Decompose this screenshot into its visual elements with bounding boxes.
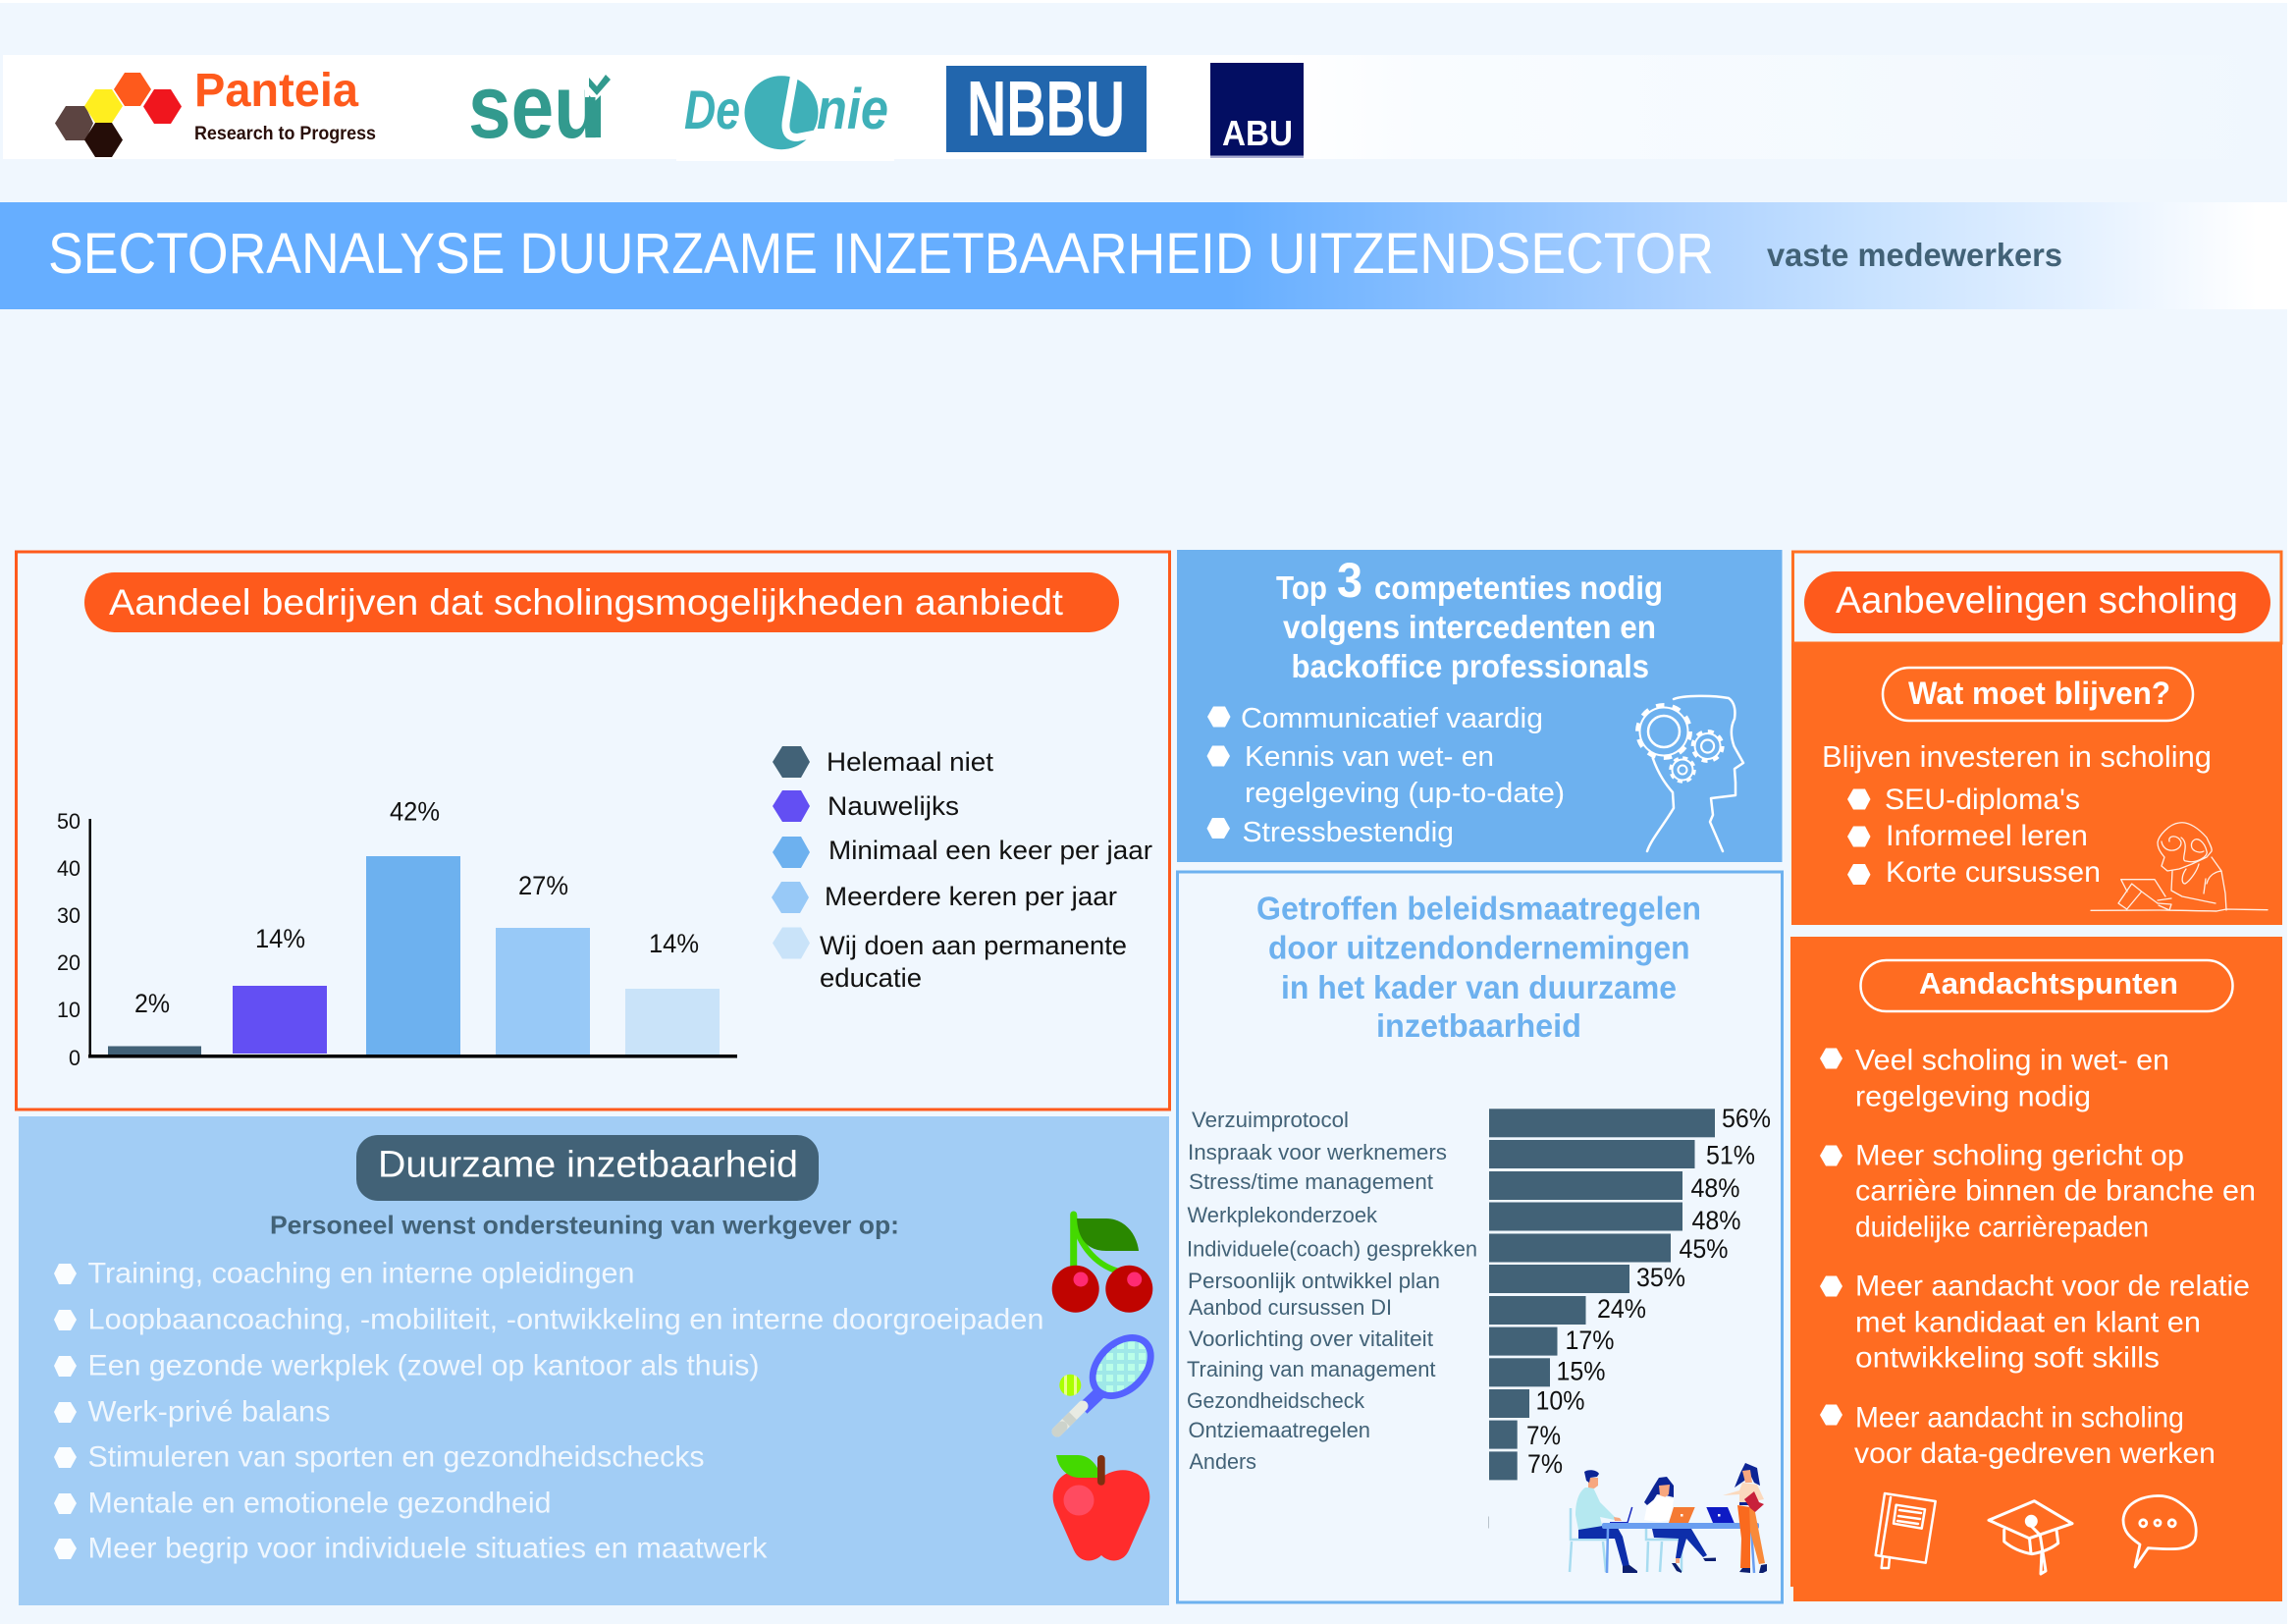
value labels: 17% [1565,1326,1614,1355]
subheading pill: Wat moet blijven? [1908,676,2170,711]
recommendations list: Informeel leren [1886,820,2088,852]
category labels: Aanbod cursussen DI [1189,1295,1392,1320]
title band [0,202,2296,309]
wishes list: Stimuleren van sporten en gezondheidschecks [88,1441,705,1473]
bar chart: 14% [649,929,699,958]
attention points list: met kandidaat en klant en [1855,1306,2201,1339]
wishes list: Mentale en emotionele gezondheid [88,1487,552,1520]
logo: NBBU: NBBU [967,65,1125,152]
legend: educatie [820,963,922,993]
panel: aandeel bedrijven [16,552,1170,1110]
category labels: Anders [1190,1449,1256,1474]
icon: graduation cap [1989,1501,2072,1574]
logo: ABU: ABU [1222,113,1293,153]
heading: door uitzendondernemingen [1268,929,1690,966]
heading pill [1804,571,2270,633]
competencies list: Kennis van wet- en [1245,741,1494,773]
category labels [1187,1108,1477,1474]
logo: Panteia: Research to Progress [194,124,376,144]
attention points list: regelgeving nodig [1855,1080,2091,1113]
category labels: Verzuimprotocol [1192,1108,1349,1132]
horizontal bar chart [1187,1104,1771,1528]
title: SECTORANALYSE DUURZAME INZETBAARHEID UITZENDSECTOR [48,222,1714,286]
man [1575,1488,1615,1530]
icon: head with gears [1637,696,1743,851]
competencies list [1207,703,1565,848]
heading pill: Duurzame inzetbaarheid [378,1145,798,1186]
subheading pill: Aandachtspunten [1919,966,2178,1001]
panel: aanbevelingen scholing [1790,552,2282,1601]
intro text: Blijven investeren in scholing [1822,739,2212,774]
wishes list: Meer begrip voor individuele situaties en maatwerk [88,1532,769,1565]
bars [1489,1109,1715,1480]
legend: Meerdere keren per jaar [825,882,1117,911]
bar chart: 20 [57,950,80,975]
category labels: Inspraak voor werknemers [1188,1140,1447,1164]
recommendations list: SEU-diploma's [1885,784,2080,816]
heading pill [356,1135,819,1201]
bar chart: 10 [57,998,80,1022]
legend: Minimaal een keer per jaar [828,836,1152,865]
wishes list: Een gezonde werkplek (zowel op kantoor als thuis) [88,1349,760,1382]
wishes list: Loopbaancoaching, -mobiliteit, -ontwikkeling en interne doorgroeipaden [88,1304,1044,1335]
heading [1256,890,1701,1044]
competencies list: regelgeving (up-to-date) [1245,778,1565,809]
attention points list: Veel scholing in wet- en [1855,1045,2169,1076]
heading pill [84,572,1119,632]
woman seated [1644,1477,1674,1507]
legend: Wij doen aan permanente [820,931,1127,960]
legend: Nauwelijks [828,791,959,821]
category labels: Voorlichting over vitaliteit [1189,1326,1433,1351]
heading: Getroffen beleidsmaatregelen [1256,890,1701,927]
icon: book [1876,1493,1936,1568]
logo: De Unie [684,71,888,149]
logo: Panteia: Panteia [194,65,358,117]
subheading: Personeel wenst ondersteuning van werkgever op: [270,1210,899,1239]
recommendations list: Korte cursussen [1886,856,2101,889]
icon: speech bubble [2123,1495,2196,1567]
logo: De Unie: De [684,79,740,140]
bar chart: 2% [134,989,170,1018]
attention points list: Meer aandacht voor de relatie [1855,1271,2250,1302]
category labels: Gezondheidscheck [1187,1388,1365,1413]
subheading pill [1883,668,2193,721]
bar chart [57,797,737,1070]
competencies list: Stressbestendig [1243,817,1454,848]
attention points list: carrière binnen de branche en [1855,1174,2256,1208]
value labels: 35% [1636,1263,1685,1292]
illustration: team meeting [1570,1463,1767,1573]
wishes list [54,1257,1044,1565]
attention points list [1820,1045,2256,1470]
subheading pill [1861,960,2232,1011]
category labels: Persoonlijk ontwikkel plan [1188,1269,1440,1293]
category labels: Werkplekonderzoek [1188,1203,1378,1227]
logo: SEU: seu [468,57,601,157]
category labels: Stress/time management [1189,1169,1433,1194]
wishes list: Werk-privé balans [88,1396,330,1428]
legend: Helemaal niet [827,747,994,777]
category labels: Individuele(coach) gesprekken [1187,1237,1477,1261]
attention points list: duidelijke carrièrepaden [1855,1212,2149,1243]
heading: backoffice professionals [1292,648,1649,684]
panel: duurzame inzetbaarheid [19,1116,1169,1605]
bar chart: 27% [518,871,568,900]
bar chart: 30 [57,903,80,928]
value labels: 7% [1527,1449,1563,1479]
heading: competenties nodig [1374,569,1663,606]
value labels: 7% [1526,1421,1561,1450]
heading: 3 [1337,553,1362,608]
bar chart: 50 [57,809,80,834]
value labels: 48% [1692,1206,1741,1235]
value labels: 45% [1679,1234,1728,1264]
laptop [1706,1507,1735,1523]
panel: top 3 competenties [1177,550,1783,862]
panel: wat moet blijven [1791,643,2282,925]
heading pill: Aandeel bedrijven dat scholingsmogelijkheden aanbiedt [109,582,1064,623]
bar chart: 42% [390,797,440,827]
panel: beleidsmaatregelen [1178,872,1783,1602]
icon: apple [1053,1455,1149,1560]
logo: Panteia [55,65,376,157]
value labels: 24% [1597,1294,1646,1324]
wishes list: Training, coaching en interne opleidingen [88,1257,634,1290]
attention points list: Meer scholing gericht op [1855,1139,2184,1172]
logo: ABU [1210,63,1304,158]
attention points list: ontwikkeling soft skills [1855,1341,2160,1375]
heading: inzetbaarheid [1376,1007,1581,1044]
table [1602,1523,1759,1529]
value labels: 56% [1722,1104,1771,1133]
value labels: 51% [1706,1141,1755,1170]
logo: De Unie: nie [817,78,888,141]
heading: volgens intercedenten en [1283,609,1656,645]
bar chart: 40 [57,856,80,881]
value labels: 15% [1557,1357,1606,1386]
heading: in het kader van duurzame [1281,969,1677,1005]
value labels: 10% [1535,1386,1584,1416]
woman standing [1735,1463,1760,1488]
category labels: Ontziemaatregelen [1188,1418,1370,1442]
heading pill: Aanbevelingen scholing [1836,580,2238,622]
icon: tennis racket [1052,1334,1154,1437]
heading [1276,553,1663,684]
recommendations list [1847,784,2101,889]
illustration: person with tablet [2091,823,2268,911]
logo band [3,55,2287,161]
icon: cherries [1052,1215,1152,1313]
panel: aandachtspunten [1790,937,2282,1601]
competencies list: Communicatief vaardig [1241,703,1543,734]
bar chart: 0 [69,1046,80,1070]
value labels [1526,1104,1771,1479]
legend [772,746,1152,993]
attention points list: Meer aandacht in scholing [1855,1402,2184,1434]
chairs [1570,1508,1682,1572]
bar chart: 14% [255,924,305,953]
heading: Top [1276,569,1327,606]
subtitle: vaste medewerkers [1767,237,2062,273]
attention points list: voor data-gedreven werken [1854,1437,2216,1470]
value labels: 48% [1690,1173,1739,1203]
category labels: Training van management [1187,1357,1435,1381]
